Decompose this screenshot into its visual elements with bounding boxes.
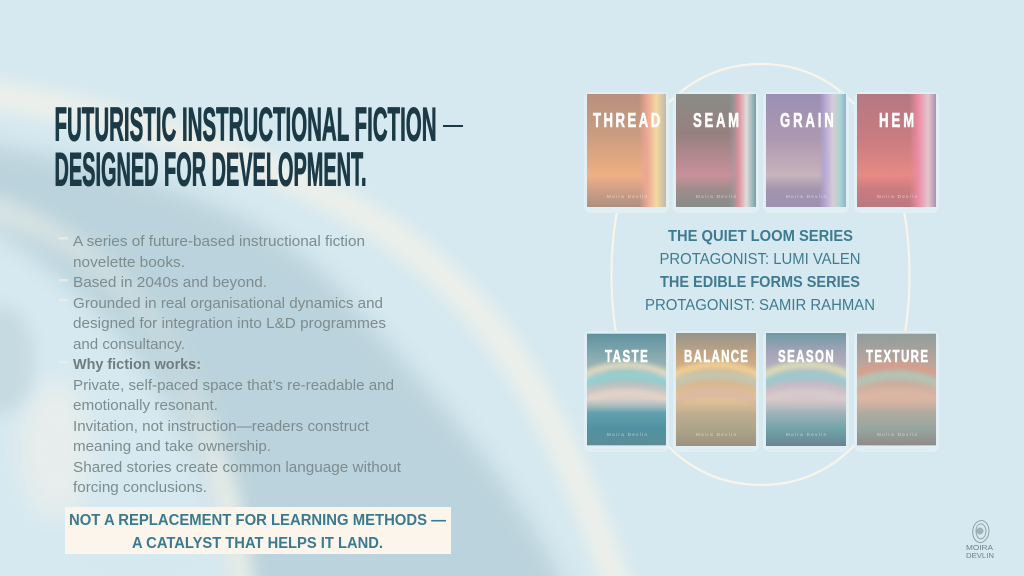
book cover: Season: Moira Devlin <box>786 432 826 437</box>
book cover: Taste: Moira Devlin <box>607 432 647 437</box>
ring connecting the books <box>612 64 910 485</box>
book cover: Taste <box>565 331 688 452</box>
book cover: Seam: Moira Devlin <box>696 194 736 199</box>
book cover: Season: SEASON <box>778 347 834 367</box>
body text: series description and why fiction works: Invitation, not instruction—readers construct <box>73 419 369 435</box>
book cover: Hem <box>854 92 939 213</box>
logo: Moira Devlin: MOIRA <box>966 543 993 552</box>
callout <box>65 507 451 554</box>
book cover: Grain: Moira Devlin <box>786 194 826 199</box>
logo: Moira Devlin <box>966 521 994 560</box>
series text <box>645 228 875 314</box>
body text: series description and why fiction works: Private, self-paced space that’s re-readable and <box>73 378 394 394</box>
series text: THE EDIBLE FORMS SERIES <box>660 274 860 291</box>
book cover: Seam <box>673 92 759 213</box>
logo: Moira Devlin: DEVLIN <box>966 551 994 560</box>
book cover: Hem: Moira Devlin <box>877 194 917 199</box>
body text: series description and why fiction works: Grounded in real organisational dynamics and <box>73 296 383 312</box>
book cover: Season <box>744 331 868 452</box>
callout: NOT A REPLACEMENT FOR LEARNING METHODS — <box>69 512 446 529</box>
book cover: Texture: Moira Devlin <box>877 432 917 437</box>
book cover: Thread <box>584 92 669 213</box>
book cover: Thread: THREAD <box>593 108 660 132</box>
title: DESIGNED FOR DEVELOPMENT. <box>54 142 366 196</box>
book cover: Seam: SEAM <box>693 108 739 132</box>
book cover: Thread: Moira Devlin <box>607 194 647 199</box>
body text: series description and why fiction works <box>73 234 401 496</box>
book cover: Texture: TEXTURE <box>866 347 928 367</box>
body text: series description and why fiction works: Based in 2040s and beyond. <box>73 275 267 291</box>
body text: series description and why fiction works: novelette books. <box>73 255 185 271</box>
book cover: Balance: BALANCE <box>684 347 748 367</box>
book cover: Texture <box>835 331 958 452</box>
body text: series description and why fiction works: A series of future-based instructional fiction <box>73 234 365 250</box>
book cover: Taste: TASTE <box>605 347 648 367</box>
bullet dashes <box>59 237 68 364</box>
text: FUTURISTIC INSTRUCTIONAL FICTION <box>54 98 436 150</box>
title: — <box>443 108 463 140</box>
title <box>54 98 463 196</box>
body text: series description and why fiction works: Shared stories create common language without <box>73 460 401 476</box>
book cover: Balance <box>654 331 778 452</box>
series text: PROTAGONIST: SAMIR RAHMAN <box>645 297 875 314</box>
body text: series description and why fiction works: emotionally resonant. <box>73 398 218 414</box>
callout: A CATALYST THAT HELPS IT LAND. <box>132 535 383 552</box>
series text: THE QUIET LOOM SERIES <box>668 228 853 245</box>
body text: series description and why fiction works: meaning and take ownership. <box>73 439 271 455</box>
body text: series description and why fiction works: forcing conclusions. <box>73 480 207 496</box>
body text: series description and why fiction works: Why fiction works: <box>73 357 201 373</box>
body text: series description and why fiction works: and consultancy. <box>73 337 185 353</box>
book cover: Grain <box>763 92 849 213</box>
book cover: Hem: HEM <box>879 108 914 132</box>
body text: series description and why fiction works: designed for integration into L&D programmes <box>73 316 386 332</box>
book cover: Grain: GRAIN <box>780 108 834 132</box>
book cover: Balance: Moira Devlin <box>696 432 736 437</box>
series text: PROTAGONIST: LUMI VALEN <box>660 251 860 268</box>
